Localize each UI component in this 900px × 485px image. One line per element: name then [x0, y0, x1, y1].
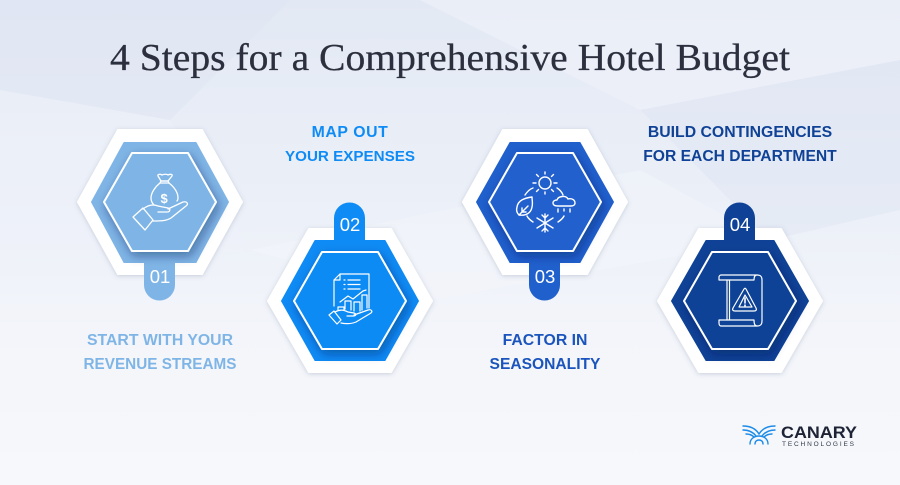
icon: warning scroll	[719, 275, 762, 326]
icon: money bag on hand	[133, 174, 187, 230]
hexagon badge 01: 01	[150, 266, 170, 287]
hexagon badge 02	[268, 202, 432, 372]
logo: Canary Technologies	[743, 424, 857, 448]
step 3: seasonality	[463, 130, 627, 373]
hexagon badge 04	[658, 202, 822, 372]
hexagon badge 04: 04	[730, 214, 750, 235]
label: factor in seasonality: SEASONALITY	[490, 356, 601, 373]
label: build contingencies: FOR EACH DEPARTMENT	[643, 148, 837, 165]
hexagon badge 01	[78, 130, 242, 300]
label: map out your expenses: MAP OUT	[312, 124, 388, 141]
hexagon badge 02: 02	[340, 214, 360, 235]
wordmark: CANARY	[781, 424, 857, 442]
hexagon badge 03	[463, 130, 627, 300]
label: factor in seasonality: FACTOR IN	[503, 332, 587, 349]
step 2: expenses	[268, 124, 432, 372]
label: start with your revenue streams: START WITH YOUR	[87, 332, 234, 349]
icon: seasons cycle	[517, 172, 575, 232]
title: 4 Steps for a Comprehensive Hotel Budget	[110, 37, 790, 79]
label: start with your revenue streams: REVENUE STREAMS	[84, 356, 236, 373]
step 1: revenue streams	[78, 130, 242, 373]
icon: report with chart on hand	[329, 274, 372, 324]
tagline: TECHNOLOGIES	[782, 441, 855, 448]
icon: money bag on hand: $	[160, 191, 168, 206]
step 4: contingencies	[643, 124, 837, 372]
label: map out your expenses: YOUR EXPENSES	[285, 148, 415, 165]
hexagon badge 03: 03	[535, 266, 555, 287]
label: build contingencies: BUILD CONTINGENCIES	[648, 124, 832, 141]
icon: canary wings	[743, 426, 775, 444]
